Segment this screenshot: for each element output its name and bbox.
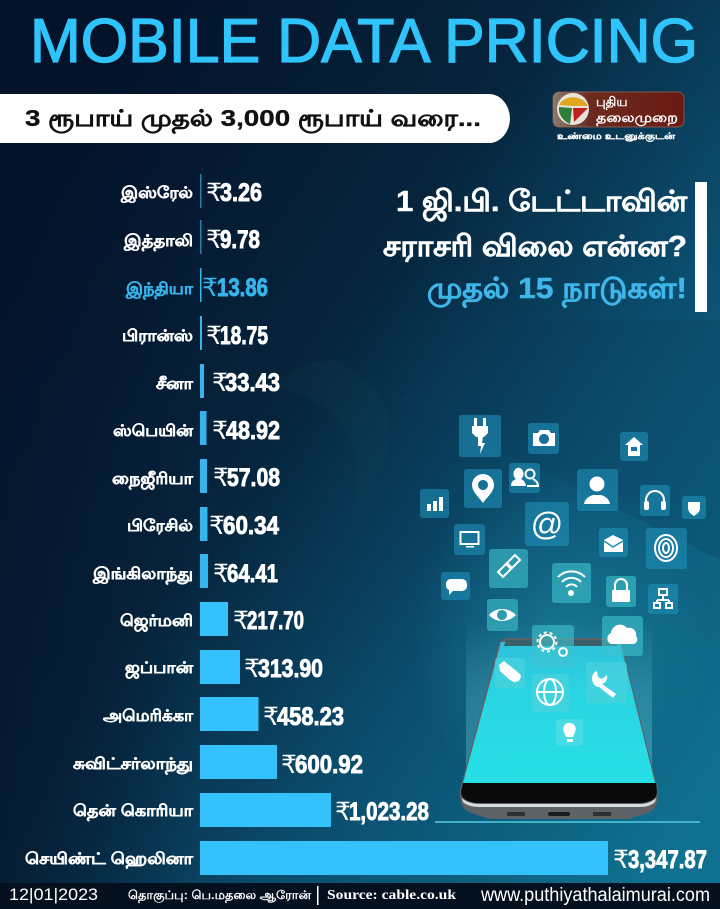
row: Switzerland: ₹ <box>281 750 297 779</box>
icon: globe <box>532 674 569 712</box>
icon: light bulb <box>556 719 583 746</box>
row: Spain: ₹ <box>212 416 228 445</box>
icon: link <box>489 549 528 588</box>
row: France: பிரான்ஸ் <box>122 328 193 345</box>
row: Italy: இத்தாலி <box>123 232 193 251</box>
icon: at sign: @ <box>531 506 563 542</box>
row: Italy: 9.78 <box>220 226 260 254</box>
row: Spain: ஸ்பெயின் <box>113 423 194 440</box>
row: Japan: 313.90 <box>258 655 323 683</box>
footer strip: www.puthiyathalaimurai.com <box>480 885 710 906</box>
row: France <box>122 316 268 350</box>
callout: question <box>383 182 707 312</box>
icon: signal bars <box>420 489 449 518</box>
row: India: இந்தியா <box>125 281 194 299</box>
row: China: ₹ <box>212 368 228 397</box>
row: Italy <box>123 220 260 254</box>
icon: users <box>509 463 540 493</box>
row: China <box>156 364 280 398</box>
icon: mouse <box>495 658 525 688</box>
subtitle banner <box>0 94 510 143</box>
row: China: சீனா <box>156 375 194 393</box>
icon: camera <box>528 423 559 454</box>
footer strip: 12|01|2023 <box>9 885 98 904</box>
icon: wifi <box>552 563 591 603</box>
row: Japan <box>125 650 323 684</box>
row: China: 33.43 <box>225 369 280 397</box>
row: America <box>103 697 344 731</box>
row: Germany: 217.70 <box>247 607 304 635</box>
icon: chat <box>441 572 470 600</box>
row: Switzerland: 600.92 <box>295 751 363 779</box>
row: Israel <box>120 174 262 208</box>
logo: Puthiya Thalaimurai: உண்மை உடனுக்குடன் <box>557 131 675 143</box>
icon: cloud <box>602 616 643 656</box>
callout: question: சராசரி விலை என்ன? <box>383 231 687 263</box>
row: Spain: 48.92 <box>226 417 280 445</box>
logo: Puthiya Thalaimurai <box>553 92 684 143</box>
row: America: ₹ <box>263 702 279 731</box>
row: South Korea: ₹ <box>335 797 351 826</box>
row: Germany: ஜெர்மனி <box>120 613 193 631</box>
subtitle banner: 3 ரூபாய் முதல் 3,000 ரூபாய் வரை... <box>25 105 481 134</box>
logo: Puthiya Thalaimurai: புதிய <box>596 94 627 110</box>
icon: at sign <box>525 502 569 546</box>
row: France: ₹ <box>206 321 222 350</box>
row: England: ₹ <box>213 559 229 588</box>
row: South Korea: தென் கொரியா <box>73 803 194 821</box>
footer strip: தொகுப்பு: பெ.மதலை ஆரோன் <box>128 888 311 903</box>
icon: headphones <box>640 485 670 516</box>
illustration: smartphone with floating app icons <box>420 415 706 823</box>
row: Israel: ₹ <box>206 178 222 207</box>
icon: lock <box>606 576 636 607</box>
row: Brazil: 60.34 <box>223 512 279 540</box>
row: Nigeria: நைஜீரியா <box>112 470 194 489</box>
footer strip: Source: cable.co.uk <box>327 888 456 903</box>
row: England: இங்கிலாந்து <box>92 566 193 584</box>
row: Spain <box>113 411 280 445</box>
row: Israel: இஸ்ரேல் <box>120 185 193 203</box>
row: South Korea: 1,023.28 <box>349 798 429 826</box>
icon: user <box>577 469 618 511</box>
icon: monitor <box>454 524 485 555</box>
row: Saint Helena: ₹ <box>613 845 629 874</box>
logo: Puthiya Thalaimurai: தலைமுறை <box>596 110 678 126</box>
row: America: அமெரிக்கா <box>103 708 194 725</box>
row: Brazil <box>127 507 279 541</box>
row: India: ₹ <box>202 273 218 302</box>
bar chart: price per GB by country <box>25 174 707 875</box>
row: Saint Helena: செயிண்ட் ஹெலினா <box>25 850 194 869</box>
icon: location pin <box>464 469 502 508</box>
icon: network <box>648 584 678 614</box>
icon: shield <box>682 496 706 519</box>
row: Japan: ஜப்பான் <box>125 660 194 678</box>
row: England <box>92 554 278 588</box>
row: South Korea <box>73 793 429 827</box>
row: Germany: ₹ <box>233 606 249 635</box>
icon: wrench <box>586 662 627 703</box>
row: Switzerland: சுவிட்சர்லாந்து <box>73 756 193 774</box>
icon: eye <box>487 599 518 631</box>
icon: mail <box>599 528 628 557</box>
row: Nigeria <box>112 459 280 493</box>
row: England: 64.41 <box>227 560 278 588</box>
icon: fingerprint <box>646 528 687 569</box>
row: Japan: ₹ <box>244 654 260 683</box>
icon: home <box>620 432 648 461</box>
title: MOBILE DATA PRICING <box>30 7 698 76</box>
row: Italy: ₹ <box>206 225 222 254</box>
light beam <box>466 620 652 790</box>
row: India: 13.86 <box>217 274 268 302</box>
icon: plug <box>459 415 501 457</box>
icon: gear <box>532 625 574 667</box>
row: Switzerland <box>73 745 363 779</box>
row: Brazil: பிரேசில் <box>127 518 193 535</box>
row: India <box>125 268 268 302</box>
row: Brazil: ₹ <box>209 511 225 540</box>
row: America: 458.23 <box>277 703 344 731</box>
callout: question: 1 ஜி.பி. டேட்டாவின் <box>396 186 688 222</box>
callout: question: முதல் 15 நாடுகள்! <box>427 273 687 309</box>
phone <box>460 638 658 819</box>
row: Nigeria: 57.08 <box>227 464 280 492</box>
row: Saint Helena <box>25 841 707 875</box>
footer strip <box>0 883 720 909</box>
row: Nigeria: ₹ <box>213 463 229 492</box>
row: France: 18.75 <box>220 322 268 350</box>
row: Israel: 3.26 <box>220 179 262 207</box>
row: Germany <box>120 602 304 636</box>
